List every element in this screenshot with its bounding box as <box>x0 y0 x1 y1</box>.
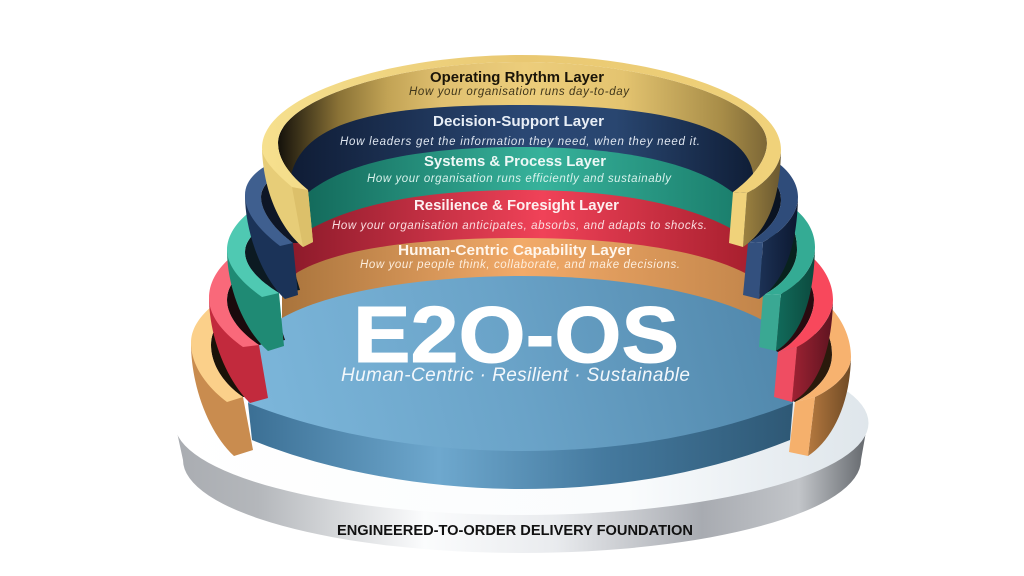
ring: teal left <box>227 210 300 351</box>
text: Systems and Process description: How your organisation runs efficiently and sustainably <box>367 173 672 185</box>
text: Human-Centric Capability description: How your people think, collaborate, and make decisions. <box>360 259 680 271</box>
ring: red left <box>209 258 285 403</box>
text: Decision-Support description: How leaders get the information they need, when they need it. <box>340 136 700 148</box>
heading: Systems and Process Layer: Systems & Process Layer <box>424 154 606 170</box>
ring: gold <box>262 55 781 247</box>
ring: orange left <box>191 306 262 456</box>
layer band: Operating Rhythm <box>278 62 767 200</box>
heading: Resilience and Foresight Layer: Resilience & Foresight Layer <box>414 198 619 214</box>
layer band: Systems and Process <box>305 147 736 280</box>
heading: Human-Centric Capability Layer: Human-Centric Capability Layer <box>398 243 632 259</box>
text: Resilience and Foresight description: How your organisation anticipates, absorbs, and adapts to shocks. <box>332 220 707 232</box>
layer band: Human-Centric Capability <box>282 238 765 360</box>
central disk <box>248 276 795 489</box>
foundation platter <box>174 331 868 553</box>
ring: teal right <box>750 210 815 351</box>
heading: Operating Rhythm Layer: Operating Rhythm Layer <box>430 70 604 86</box>
ring: red right <box>765 258 833 402</box>
ring: navy left <box>245 160 308 299</box>
layer band: Resilience and Foresight <box>290 190 750 320</box>
title: E2O-OS: E2O-OS <box>353 290 679 379</box>
layer band: Decision-Support <box>290 105 753 240</box>
ring: navy right <box>738 163 798 299</box>
foundation label: ENGINEERED-TO-ORDER DELIVERY FOUNDATION <box>337 523 693 539</box>
subtitle: values: Human-Centric · Resilient · Sustainable <box>341 365 690 386</box>
heading: Decision-Support Layer: Decision-Support Layer <box>433 114 604 130</box>
text: Operating Rhythm description: How your organisation runs day-to-day <box>409 86 630 98</box>
ring: orange right <box>780 308 851 456</box>
